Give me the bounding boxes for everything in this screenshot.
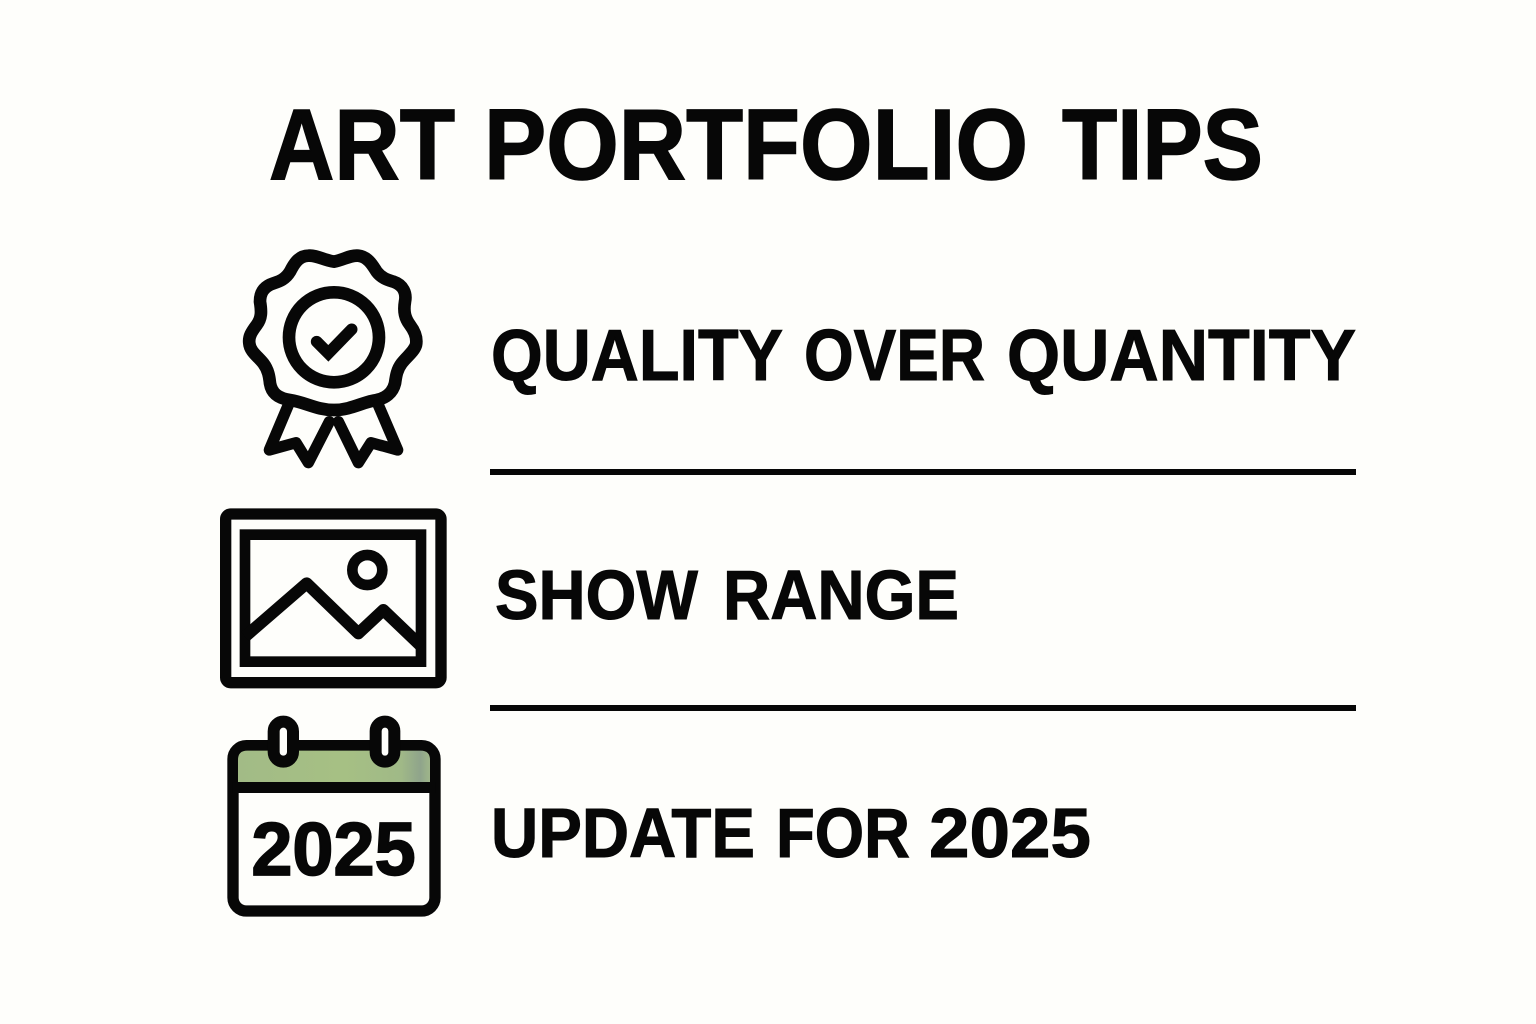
tip: update for 2025	[491, 794, 1091, 872]
tip: show range: RANGE	[723, 556, 959, 634]
tip: quality over quantity: QUANTITY	[1007, 316, 1356, 396]
right ribbon	[338, 405, 398, 463]
tip: show range: SHOW	[495, 556, 698, 634]
title: PORTFOLIO	[484, 89, 1028, 201]
outer frame	[226, 514, 441, 683]
tip: update for 2025: UPDATE	[491, 794, 755, 872]
left binder ring	[274, 722, 293, 762]
tip: quality over quantity: QUALITY	[491, 316, 783, 396]
icon: framed picture	[226, 514, 441, 683]
badge scalloped outline	[249, 256, 416, 410]
inner frame	[245, 535, 421, 662]
title	[269, 89, 1263, 201]
tip: show range	[495, 556, 959, 634]
title: ART	[269, 89, 455, 201]
icon: award badge with ribbons	[249, 256, 416, 463]
mountains	[245, 583, 422, 647]
title: TIPS	[1062, 89, 1263, 201]
right binder ring	[376, 722, 394, 762]
tip: quality over quantity	[491, 316, 1356, 396]
icon: calendar 2025	[232, 722, 436, 911]
tip: quality over quantity: OVER	[804, 316, 985, 396]
calendar body	[233, 746, 435, 911]
green header	[238, 751, 430, 783]
calendar year: 2025	[251, 807, 416, 891]
inner circle	[289, 292, 379, 382]
tip: update for 2025: 2025	[929, 794, 1091, 872]
tip: update for 2025: FOR	[776, 794, 910, 872]
check mark	[317, 329, 352, 353]
left ribbon	[269, 405, 329, 463]
sun	[352, 555, 382, 585]
